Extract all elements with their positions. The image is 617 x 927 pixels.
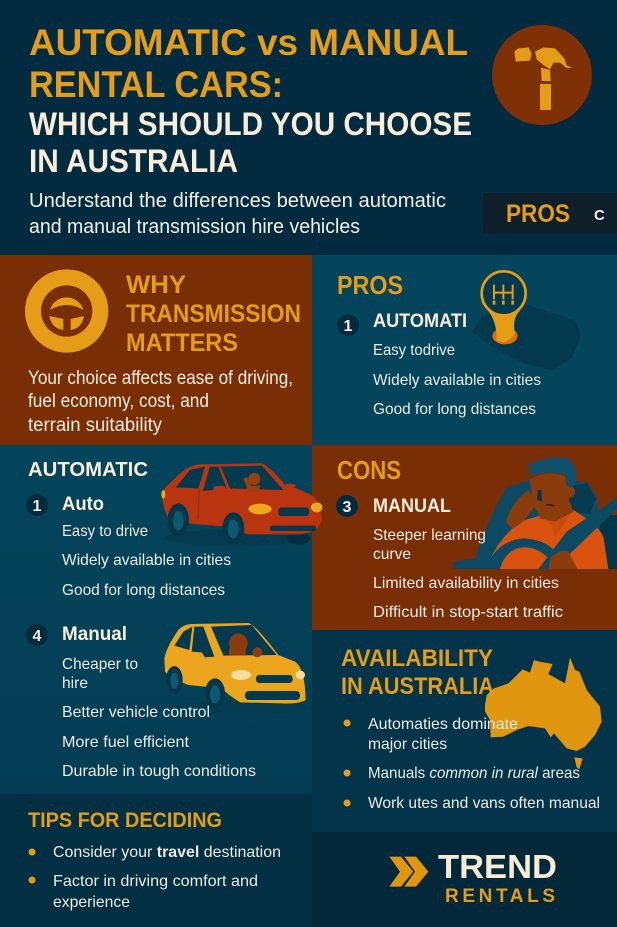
panel: logo footer [312, 832, 617, 927]
panel: why transmission matters [0, 255, 312, 445]
logo text [438, 848, 557, 907]
icon: chevrons [389, 857, 428, 887]
subtitle: and manual transmission hire vehicles [29, 216, 360, 238]
text block [28, 368, 293, 436]
icon: gear knob [472, 271, 581, 370]
panel: cons [312, 445, 617, 630]
panel: availability in australia [312, 630, 617, 832]
list [62, 523, 231, 599]
heading: WHY [126, 271, 186, 299]
list: Good for long distances [62, 582, 225, 599]
number badge: 3 [343, 499, 352, 516]
text block: Your choice affects ease of driving, [28, 368, 293, 389]
list: curve [373, 546, 411, 563]
list: Manuals common in rural areas [368, 765, 580, 782]
title: RENTAL CARS: [29, 64, 283, 105]
logo text: TREND [438, 848, 557, 885]
list: major cities [368, 736, 447, 753]
number badge: 1 [33, 498, 42, 515]
subheading: Auto [62, 494, 104, 515]
heading: CONS [337, 455, 401, 485]
number badge [26, 494, 48, 516]
manual group [26, 624, 256, 780]
heading: IN AUSTRALIA [341, 673, 494, 700]
title: AUTOMATIC vs MANUAL [29, 22, 468, 63]
list: Better vehicle control [62, 704, 210, 721]
list [373, 527, 563, 621]
illustration: yellow car [164, 623, 307, 715]
map: australia [485, 657, 602, 769]
list: Automaties dominate [368, 716, 518, 733]
icon: steering wheel [25, 269, 108, 353]
list: Widely available in cities [62, 552, 231, 569]
list: Factor in driving comfort and [53, 873, 258, 890]
list: experience [53, 894, 130, 911]
list: Limited availability in cities [373, 575, 559, 592]
subheading: Manual [62, 624, 127, 645]
subheading: MANUAL [373, 496, 451, 517]
list: Easy todrive [373, 342, 455, 359]
number badge [337, 314, 359, 336]
list: Cheaper to [62, 656, 138, 673]
title: WHICH SHOULD YOU CHOOSE [29, 106, 472, 142]
list: Steeper learning [373, 527, 486, 544]
panel: header [0, 0, 617, 255]
heading: AUTOMATIC [28, 459, 148, 481]
heading: PROS [337, 270, 403, 300]
tab: pros label: C [594, 207, 605, 224]
text block: fuel economy, cost, and [28, 391, 209, 412]
auto group [26, 494, 231, 599]
subheading: AUTOMATI [373, 311, 467, 332]
list: Consider your travel destination [53, 844, 281, 861]
heading [341, 645, 494, 700]
list: More fuel efficient [62, 734, 190, 751]
list: Good for long distances [373, 401, 536, 418]
list [373, 342, 541, 418]
heading: MATTERS [126, 329, 238, 357]
panel: pros [312, 255, 617, 445]
list: Difficult in stop-start traffic [373, 604, 563, 621]
number badge [26, 624, 48, 646]
subtitle [29, 190, 446, 238]
heading: AVAILABILITY [341, 645, 493, 672]
list: Widely available in cities [373, 372, 541, 389]
title [29, 22, 472, 179]
heading [126, 271, 301, 357]
illustration: stressed driver [453, 457, 617, 569]
number badge: 4 [33, 628, 42, 645]
tab: pros label [483, 193, 617, 234]
list: Easy to drive [62, 523, 148, 540]
list [62, 656, 256, 780]
list [344, 716, 600, 812]
icon: hammer [492, 25, 592, 125]
heading: TIPS FOR DECIDING [28, 809, 222, 832]
panel: tips for deciding [0, 794, 312, 927]
logo text: RENTALS [445, 886, 555, 907]
list: Durable in tough conditions [62, 763, 256, 780]
title: IN AUSTRALIA [29, 143, 238, 179]
illustration: red car [161, 463, 322, 546]
text block: terrain suitability [28, 415, 162, 436]
heading: TRANSMISSION [126, 300, 301, 328]
subtitle: Understand the differences between automatic [29, 190, 446, 212]
tab: pros label: PROS [506, 200, 570, 228]
list [28, 844, 281, 911]
panel: automatic and manual [0, 445, 322, 795]
number badge [336, 495, 358, 517]
list: hire [62, 675, 88, 692]
list: Work utes and vans often manual [368, 795, 600, 812]
number badge: 1 [344, 318, 353, 335]
